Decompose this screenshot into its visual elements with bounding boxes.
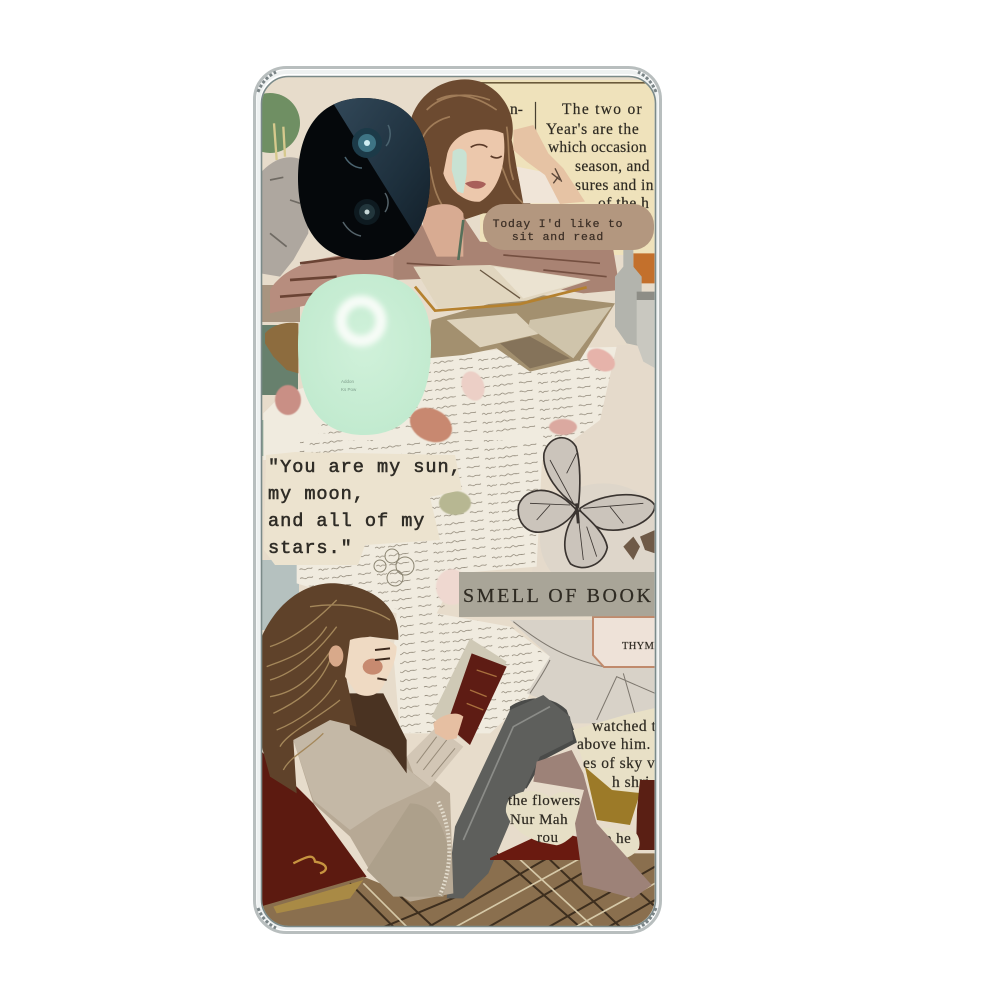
book text lower right: above him.: [577, 736, 651, 753]
book page text: Year's are the: [546, 121, 640, 138]
pill text: [492, 218, 622, 240]
face: [345, 637, 397, 696]
plaid lines: [350, 853, 655, 930]
pale blue block: [262, 560, 299, 630]
mint oval module: [298, 274, 431, 435]
quote text: [268, 457, 462, 559]
reading girl upper layer: [260, 583, 652, 902]
clear case frame: [254, 68, 660, 932]
quote text: "You are my sun,: [268, 457, 462, 478]
book page top right: [480, 80, 655, 255]
book text lower right: watched t: [592, 718, 657, 735]
speech pill: [483, 204, 654, 250]
tattoo: [552, 168, 562, 183]
quote text: and all of my: [268, 511, 425, 532]
scarf and lower hair: [347, 693, 407, 773]
handwritten letter top: [263, 347, 627, 460]
white channel: [258, 72, 656, 928]
blouse: [393, 217, 620, 293]
stack of books: [427, 293, 615, 372]
book text lower right: [573, 708, 657, 795]
book page text: n-: [510, 101, 523, 118]
left arm sleeve: [270, 256, 394, 314]
camera glass reflection: [328, 95, 440, 250]
corner bumpers: [258, 72, 656, 928]
book page text: The two or: [562, 101, 643, 118]
small print: Ks Pow: [341, 387, 357, 392]
cup: [265, 323, 298, 373]
sage block: [262, 420, 264, 456]
heart paper notes: the he: [592, 831, 631, 847]
glowing ring: [341, 301, 381, 341]
banner: smell of books: [459, 572, 660, 617]
gold fringe: [273, 880, 363, 913]
pill text: Today I'd like to: [493, 219, 623, 231]
jeans: [447, 695, 573, 898]
cat: [260, 123, 308, 277]
lower lens: [343, 193, 388, 236]
jar and bottle: [615, 250, 654, 368]
hair: [412, 79, 530, 220]
red cushion: [260, 750, 367, 907]
lips: [465, 181, 486, 189]
pill text: sit and read: [512, 232, 604, 244]
beige right panel: [572, 346, 626, 460]
banner: smell of books: SMELL OF BOOK: [463, 585, 652, 607]
small print: [341, 379, 357, 392]
paper background: [262, 77, 655, 926]
book text lower right: h shri: [612, 774, 650, 791]
cheek: [363, 659, 383, 675]
book page text: season, and: [575, 158, 650, 175]
quote text: stars.": [268, 538, 353, 559]
face features: [471, 145, 502, 158]
outer edge: [254, 68, 660, 932]
second leg: [507, 698, 578, 788]
green circle: [262, 93, 300, 153]
book page text: sures and in: [575, 177, 654, 194]
sketched rings: [374, 549, 414, 586]
hand: [433, 714, 463, 740]
hair: [260, 583, 398, 793]
sweater ribbing: [438, 802, 449, 895]
white fabric with marble veins: [510, 530, 654, 724]
inner edge: [262, 76, 656, 926]
thyme label: THYME: [622, 641, 661, 652]
phone case artwork: [240, 77, 667, 930]
sweater arm: [293, 717, 430, 830]
handwritten letter middle: [297, 433, 550, 733]
butterfly: [518, 438, 655, 568]
dark green block: [262, 325, 298, 395]
eye and lips: [375, 648, 390, 680]
arm and hand: [513, 125, 585, 204]
neck: [422, 204, 464, 257]
quote text: my moon,: [268, 484, 365, 505]
ear: [329, 645, 343, 667]
yellow patch: [585, 767, 640, 825]
dark red cushion right: [636, 780, 660, 850]
book page top rule: [480, 82, 655, 84]
small print: Addon: [341, 379, 355, 384]
sleeve cuff: [407, 727, 463, 787]
table band: [262, 285, 300, 322]
book page text: of the h: [598, 195, 649, 212]
petals: [275, 344, 619, 605]
heart paper notes: [506, 791, 640, 860]
camera body: [298, 98, 430, 260]
red cloth under leg: [490, 830, 590, 860]
face: [443, 129, 504, 202]
hair curls: [267, 600, 390, 770]
book page text: which occasion: [548, 139, 647, 156]
quote paper: [264, 452, 462, 565]
book: [432, 638, 507, 745]
handwriting texture: [318, 356, 614, 464]
hair strands: [422, 95, 523, 217]
book text lower right: es of sky v: [583, 755, 655, 772]
sweater body: [293, 723, 453, 902]
heart paper notes: Nur Mah: [510, 812, 568, 828]
open book: [413, 265, 591, 308]
heart paper notes: the flowers: [508, 793, 581, 809]
thyme label: [593, 617, 661, 667]
heart paper notes: rou: [537, 830, 558, 846]
upper lens: [345, 125, 390, 168]
plaid blanket: [260, 853, 655, 930]
glitch patch: [452, 149, 467, 193]
white gap under arm: [517, 167, 570, 203]
camera module: [298, 95, 440, 260]
top girl: [265, 79, 620, 373]
socks: [533, 750, 652, 898]
handwriting texture middle: [297, 440, 545, 733]
mint body: [298, 274, 431, 435]
reading girl lower layer: [260, 695, 655, 930]
book page text: [510, 101, 654, 212]
